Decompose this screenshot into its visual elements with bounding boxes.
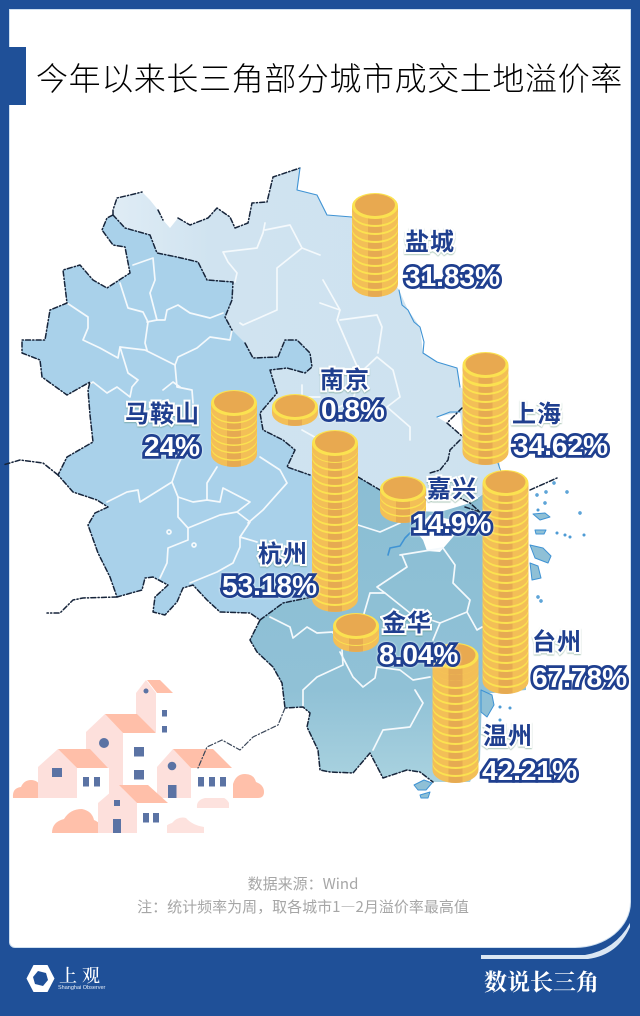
- label: Nanjing: [318, 365, 388, 425]
- footer logo: [26, 962, 106, 992]
- coin stack: Hangzhou: [312, 430, 358, 612]
- label: Jinhua: 金华: [382, 610, 432, 637]
- islands: [414, 482, 585, 798]
- label: Hangzhou: 杭州: [258, 541, 308, 568]
- label: Wenzhou: 温州: [483, 723, 533, 750]
- Jiangxi-Fujian boundary: [198, 708, 285, 768]
- label: Maanshan: 24%: [144, 431, 200, 462]
- label: Wenzhou: 42.21%: [482, 755, 577, 786]
- label: Yancheng: [402, 228, 502, 292]
- river: [388, 533, 410, 555]
- label: Jiaxing: 嘉兴: [427, 476, 477, 503]
- coin stack: Nanjing: [272, 394, 318, 426]
- coast line: [297, 168, 501, 472]
- label: Nanjing: 0.8%: [321, 394, 385, 425]
- label: Jiaxing: 14.9%: [412, 508, 491, 539]
- label: Jinhua: [376, 608, 462, 670]
- label: Taizhou: 台州: [532, 629, 582, 656]
- footer brand: 数说长三角: [484, 964, 599, 997]
- coin stack: Yancheng: [352, 193, 398, 297]
- label: Taizhou: [530, 628, 629, 693]
- logo subtitle: Shanghai Observer: [58, 985, 105, 991]
- label: Yancheng: 31.83%: [405, 261, 500, 292]
- source notes: [137, 873, 469, 917]
- bottom house: [98, 785, 168, 833]
- left house: [38, 749, 109, 798]
- source line: 数据来源：Wind: [248, 873, 358, 894]
- internal boundaries: [67, 223, 482, 750]
- label: Taizhou: 67.78%: [532, 662, 627, 693]
- logo mark: [26, 965, 54, 992]
- label: Jinhua: 8.04%: [379, 639, 458, 670]
- label: Jiaxing: [409, 474, 495, 539]
- provincial boundaries: [3, 168, 557, 782]
- label: Maanshan: 马鞍山: [125, 401, 200, 428]
- label: Yancheng: 盐城: [405, 229, 455, 256]
- coin stack: Jinhua: [333, 613, 379, 652]
- Hangzhou Bay: [415, 515, 462, 552]
- house illustration: [13, 680, 264, 833]
- label: Maanshan: [124, 398, 204, 462]
- title tab: [0, 47, 26, 105]
- logo text: 上观: [59, 962, 105, 988]
- region: Anhui: [22, 215, 358, 620]
- clouds: [13, 774, 264, 833]
- label: Hangzhou: [218, 539, 320, 601]
- coin stack: Shanghai: [462, 352, 508, 465]
- coin stack: Maanshan: [211, 390, 257, 467]
- title: 今年以来长三角部分城市成交土地溢价率: [36, 54, 623, 100]
- note line: 注：统计频率为周，取各城市1—2月溢价率最高值: [137, 896, 469, 917]
- map: [3, 168, 585, 798]
- right house: [157, 749, 232, 798]
- label: Wenzhou: [480, 723, 579, 786]
- region: Jiangsu and Shanghai: [113, 168, 500, 500]
- label: Shanghai: 34.62%: [513, 430, 608, 461]
- tall house: [86, 714, 156, 795]
- region: Zhejiang: [250, 477, 526, 782]
- label: Shanghai: [510, 400, 610, 461]
- Yangtze estuary: [437, 412, 463, 437]
- label: Nanjing: 南京: [320, 367, 370, 394]
- coin stack: Wenzhou: [432, 643, 478, 783]
- tower house: [136, 680, 173, 732]
- coin stack: Taizhou: [482, 470, 528, 694]
- coin stack: Jiaxing: [380, 476, 426, 523]
- label: Shanghai: 上海: [512, 401, 562, 428]
- label: Hangzhou: 53.18%: [222, 570, 317, 601]
